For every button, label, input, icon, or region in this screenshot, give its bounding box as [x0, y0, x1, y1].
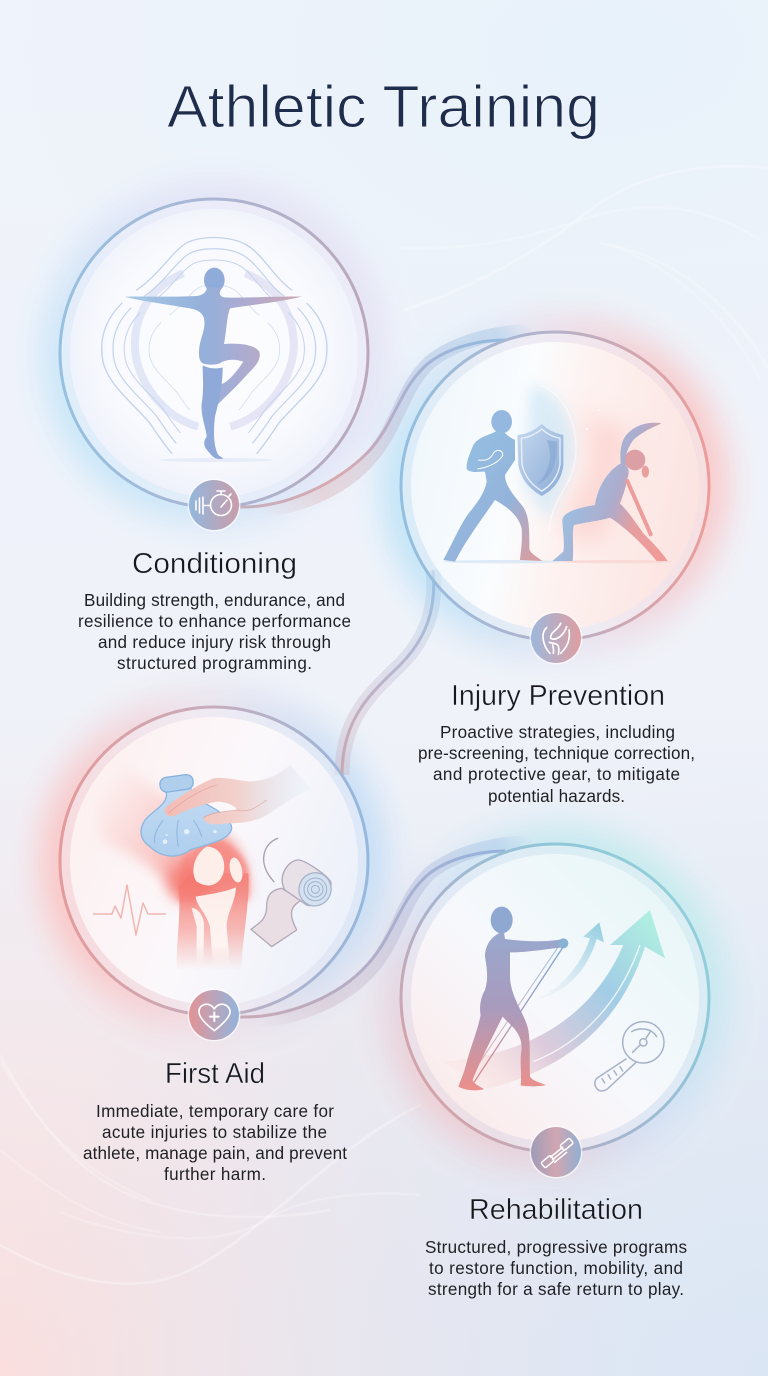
circle frame — [401, 844, 709, 1152]
text block: rehabilitation: to restore function, mobility, and — [429, 1259, 683, 1278]
text block: conditioning: Conditioning — [132, 548, 297, 580]
text block: rehabilitation: Rehabilitation — [469, 1194, 643, 1226]
text block: conditioning: structured programming. — [117, 654, 312, 673]
circle frame — [60, 707, 368, 1015]
text block: conditioning: Building strength, endurance, and — [84, 591, 345, 610]
icon: heartbeat line — [93, 885, 166, 935]
badge: first aid — [188, 988, 240, 1042]
connector: first aid to rehabilitation — [240, 842, 535, 1020]
text block: first aid: First Aid — [165, 1058, 265, 1090]
text block: first aid: Immediate, temporary care for — [96, 1102, 334, 1121]
illustration: balancing athlete — [125, 268, 302, 462]
text block: conditioning: resilience to enhance performance — [78, 612, 351, 631]
text block: first aid — [83, 1058, 347, 1184]
circle frame — [60, 199, 368, 507]
connector: conditioning to injury prevention — [240, 331, 535, 510]
illustration: athlete stretching — [552, 409, 668, 561]
icon: knee — [543, 623, 569, 654]
text block: conditioning — [78, 548, 351, 673]
title: Athletic Training — [167, 74, 600, 140]
illustration: knee joint — [97, 768, 249, 970]
icon: heart with plus — [199, 1004, 230, 1031]
illustration: athlete with resistance band — [458, 907, 568, 1090]
panel: first aid — [60, 707, 368, 1015]
text block: injury prevention: potential hazards. — [488, 787, 625, 806]
circle frame — [401, 332, 709, 640]
text block: injury prevention: Injury Prevention — [451, 680, 665, 712]
icon: shield — [517, 424, 563, 496]
icon: progress arrows — [443, 910, 665, 1088]
panel: injury prevention — [401, 332, 709, 640]
badge: rehabilitation — [530, 1126, 582, 1178]
text block: conditioning: and reduce injury risk through — [98, 633, 331, 652]
text block: rehabilitation — [425, 1194, 687, 1299]
icon: ice pack — [141, 774, 232, 856]
icon: bandage roll — [251, 838, 336, 947]
badge: injury prevention — [530, 612, 582, 664]
panel: conditioning — [60, 199, 368, 507]
glow: circle halos — [64, 203, 705, 1148]
illustration: light divide — [443, 385, 673, 563]
illustration: hand — [165, 765, 310, 824]
panel: rehabilitation — [401, 844, 709, 1152]
icon: measurement gauge — [595, 1022, 664, 1091]
icon: chest expander — [541, 1138, 573, 1168]
text block: injury prevention: Proactive strategies, including — [440, 723, 675, 742]
icon: dumbbell and stopwatch — [196, 491, 232, 516]
text block: rehabilitation: Structured, progressive programs — [425, 1238, 687, 1257]
text block: injury prevention: and protective gear, to mitigate — [433, 765, 680, 784]
text block: first aid: athlete, manage pain, and prevent — [83, 1144, 347, 1163]
text block: first aid: acute injuries to stabilize the — [102, 1123, 327, 1142]
text block: rehabilitation: strength for a safe return to play. — [428, 1280, 684, 1299]
text block: first aid: further harm. — [164, 1165, 266, 1184]
badge: conditioning — [188, 478, 240, 532]
illustration: athlete with guard — [443, 410, 542, 562]
illustration: concentric energy waves — [102, 237, 327, 453]
connector: injury prevention to first aid — [342, 570, 434, 775]
text block: injury prevention — [418, 680, 695, 806]
text block: injury prevention: pre-screening, technique correction, — [418, 744, 695, 763]
